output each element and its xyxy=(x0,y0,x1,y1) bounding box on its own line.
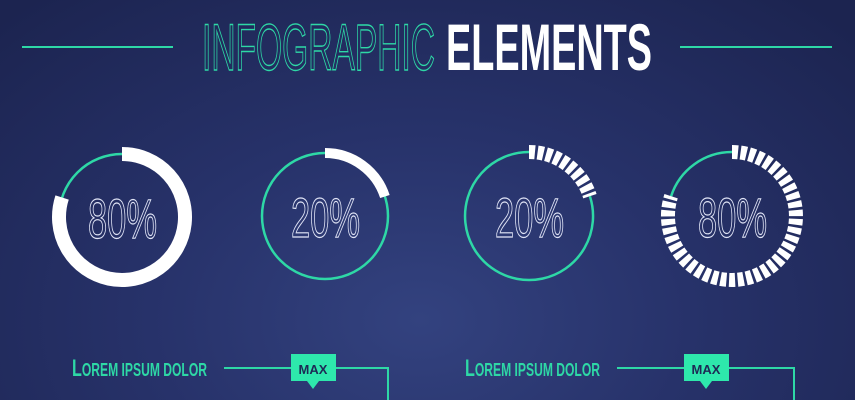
title: ELEMENTS xyxy=(446,10,652,84)
chart: circle 1 80%: 80% xyxy=(88,187,157,250)
label row left: MAX xyxy=(299,362,328,377)
label row right xyxy=(465,354,794,400)
chart: circle 2 20%: 20% xyxy=(291,186,360,249)
label row right: LOREM IPSUM DOLOR xyxy=(465,355,600,382)
chart: circle 1 80% xyxy=(59,154,185,280)
chart: circle 4 80% segmented: 80% xyxy=(698,186,767,249)
chart: circle 3 20% segmented: 20% xyxy=(495,186,564,249)
label row left xyxy=(72,354,388,400)
title: INFOGRAPHIC xyxy=(202,10,435,84)
label row right: MAX xyxy=(692,362,721,377)
chart: circle 2 20% xyxy=(262,153,388,279)
chart: circle 4 80% segmented xyxy=(668,152,796,280)
title xyxy=(22,10,832,84)
chart: circle 3 20% segmented xyxy=(465,152,593,280)
label row left: LOREM IPSUM DOLOR xyxy=(72,355,207,382)
